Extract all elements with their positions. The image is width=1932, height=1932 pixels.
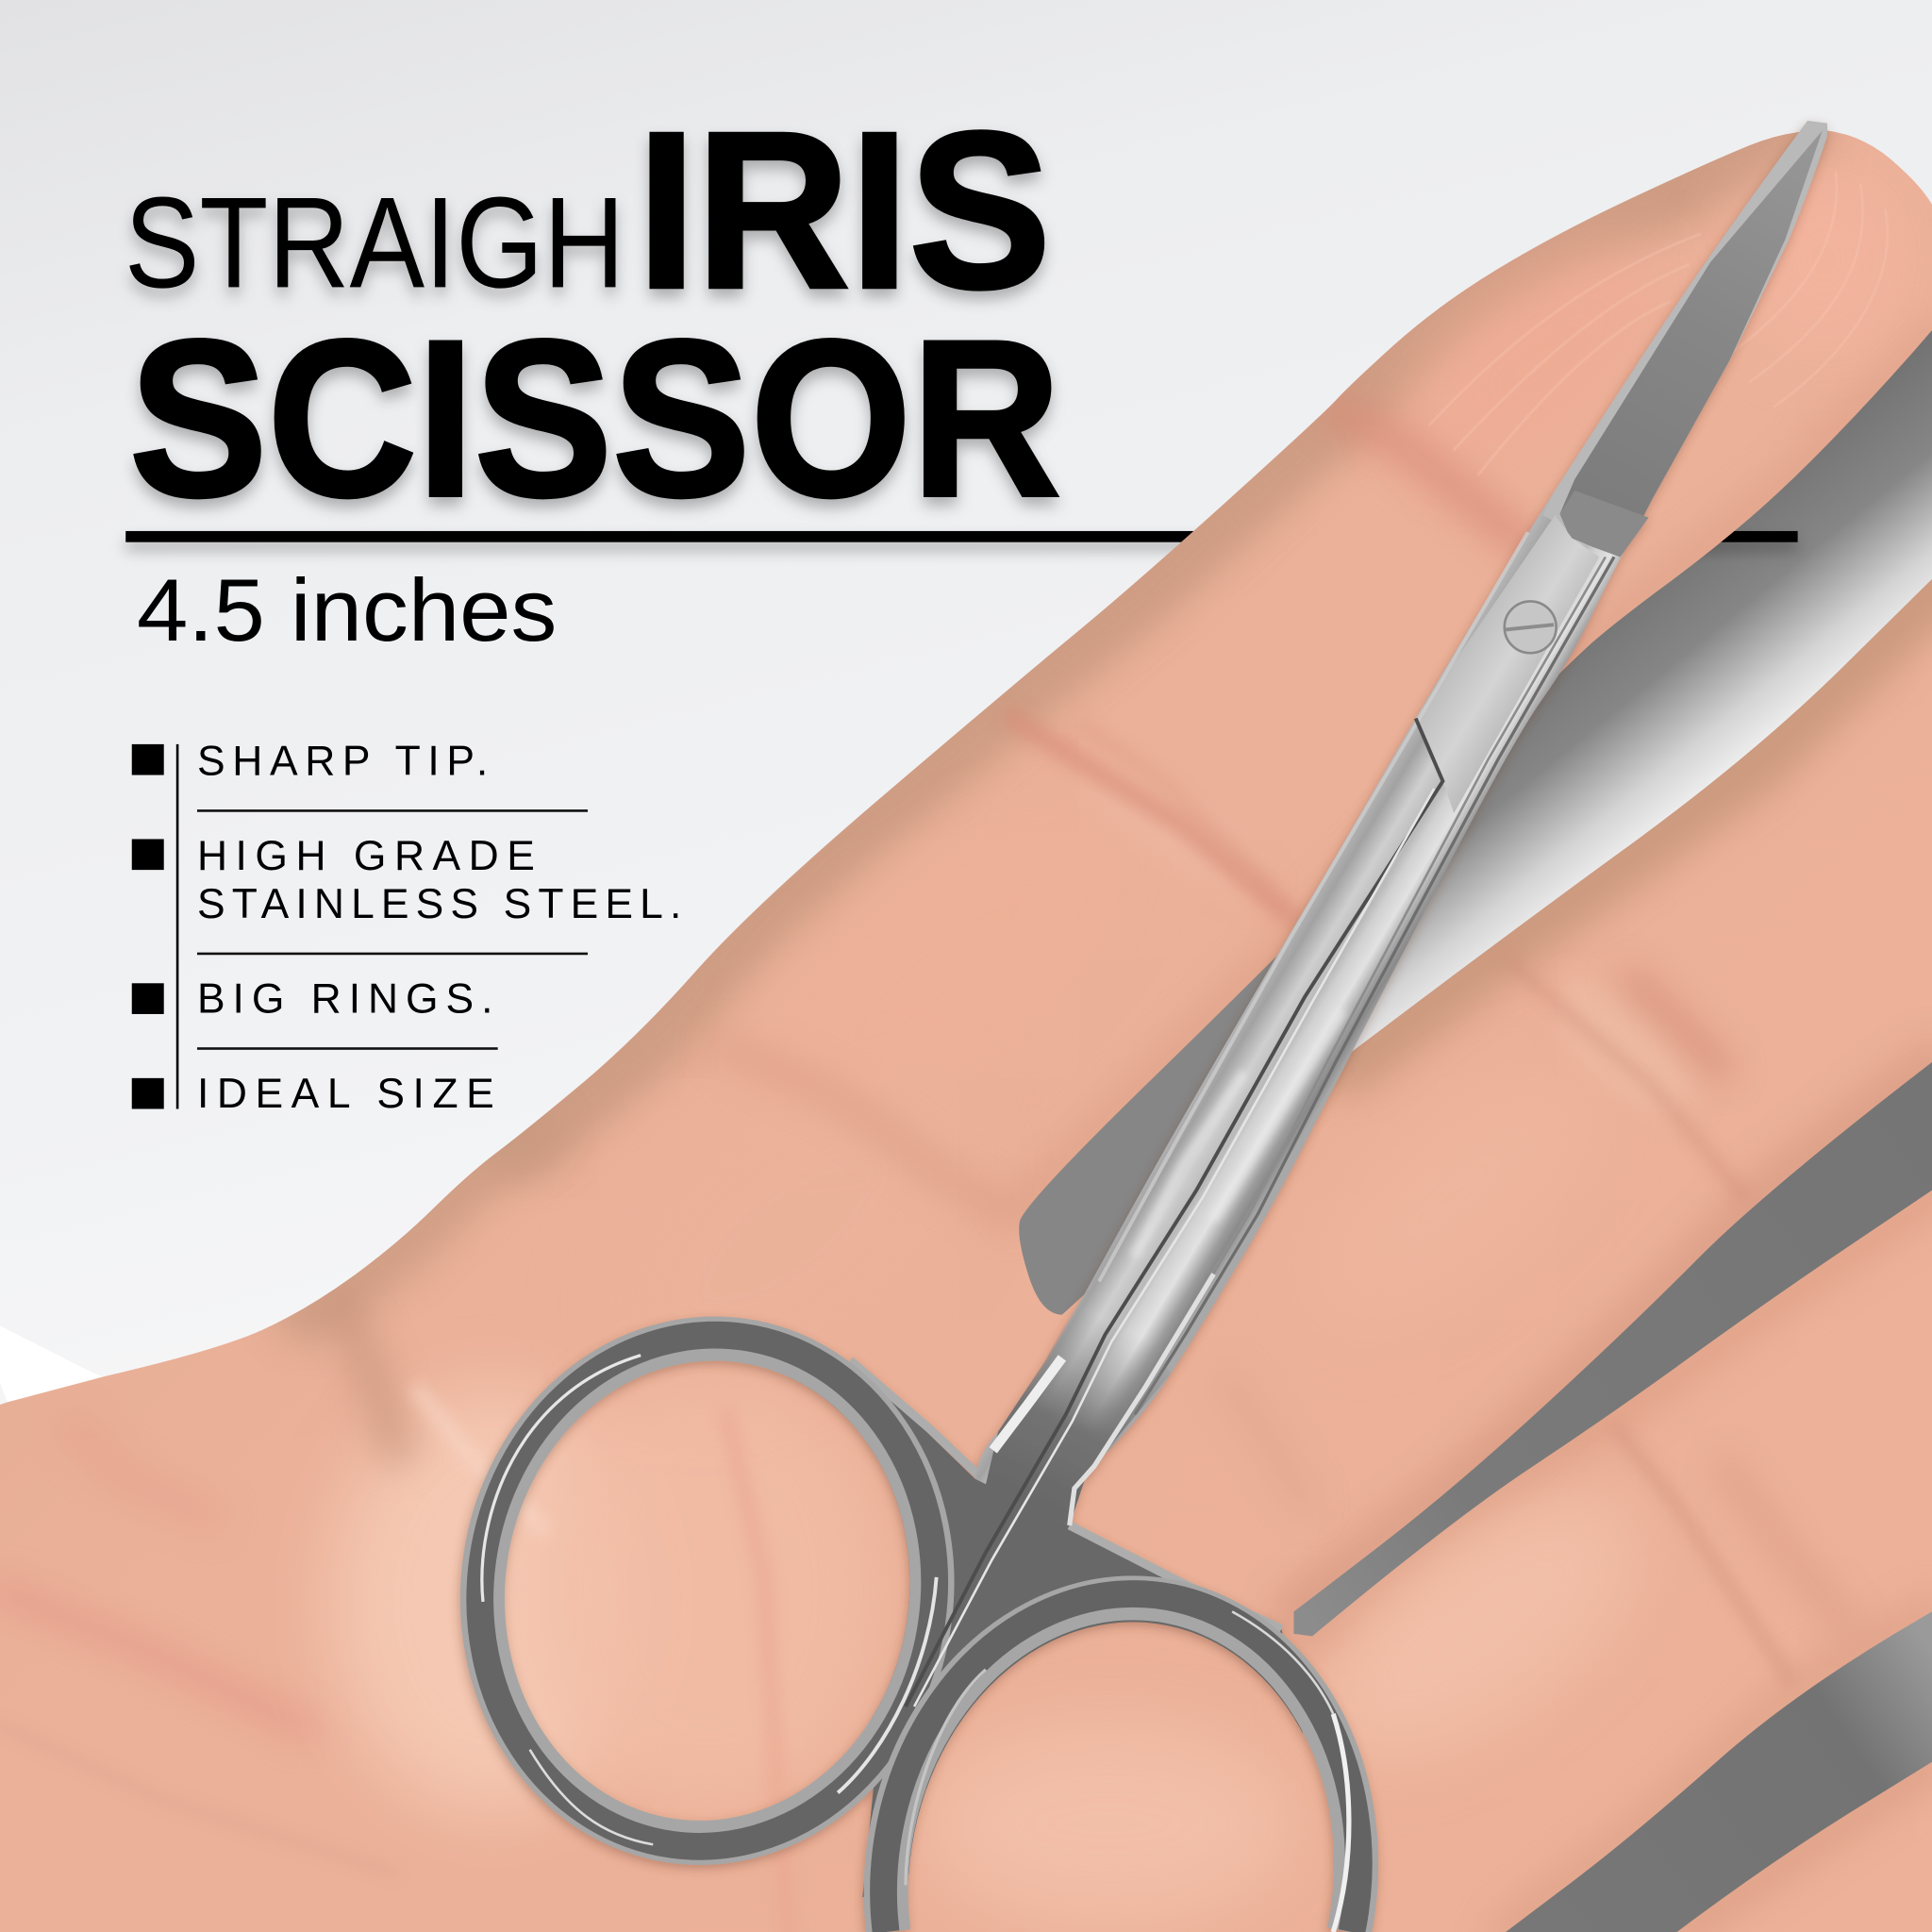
white corner wedge — [0, 1325, 105, 1402]
finger shadows — [1010, 308, 1932, 1932]
blade outer — [1542, 121, 1827, 557]
bullet 3 — [132, 983, 164, 1014]
size label: 4.5 inches — [137, 560, 557, 659]
hub and handle arms — [789, 1333, 1306, 1897]
left finger ring — [447, 1306, 968, 1876]
fingerprint ridges — [1429, 173, 1888, 475]
shaft base shading — [986, 1244, 1171, 1525]
screw — [1505, 601, 1557, 653]
feature: high grade stainless steel: HIGH GRADE — [197, 833, 535, 879]
blade heel — [1560, 491, 1649, 557]
side ridges — [1099, 532, 1614, 1414]
groove highlight — [914, 789, 1434, 1707]
title line: STRAIGH IRIS — [125, 86, 1051, 335]
right finger ring — [884, 1593, 1358, 1932]
feature: high grade stainless steel: STAINLESS STEEL. — [197, 881, 681, 927]
list vertical rule — [176, 744, 178, 1109]
feature: sharp tip: SHARP TIP. — [197, 739, 488, 785]
joint groove — [906, 718, 1442, 1707]
title line: STRAIGH IRIS: IRIS — [637, 86, 1051, 335]
shaft highlights — [993, 1010, 1343, 1525]
creases — [0, 413, 1848, 1932]
bullet 4 — [132, 1078, 164, 1109]
title line: SCISSOR: SCISSOR — [129, 294, 1061, 543]
joint plate — [1416, 515, 1599, 813]
feature: big rings: BIG RINGS. — [197, 976, 492, 1023]
light palm and finger pads — [333, 160, 1909, 1923]
blade flat — [1560, 130, 1823, 557]
title — [125, 86, 1798, 543]
divider 3 — [197, 1047, 498, 1050]
scissors — [447, 121, 1827, 1932]
bullet 2 — [132, 839, 164, 870]
feature: ideal size: IDEAL SIZE — [197, 1071, 494, 1117]
bullet 1 — [132, 744, 164, 775]
divider 1 — [197, 809, 588, 812]
feature: high grade stainless steel — [197, 833, 681, 927]
shaft and blade body — [974, 121, 1827, 1525]
feature list — [132, 739, 681, 1117]
title line: STRAIGH IRIS: STRAIGH — [125, 171, 625, 315]
divider 2 — [197, 953, 588, 955]
title rule — [125, 531, 1798, 542]
